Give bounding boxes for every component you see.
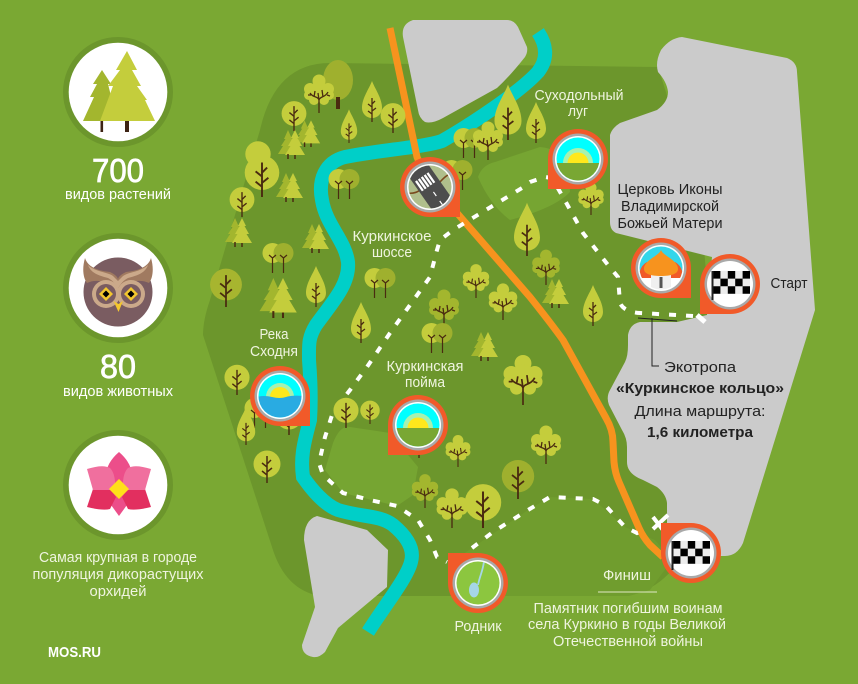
- stat: orchids: орхидей: [90, 584, 146, 600]
- map labels: Родник: [454, 619, 502, 635]
- trees: [210, 60, 604, 528]
- stat: plants: 700: [92, 152, 144, 189]
- map labels: Церковь Иконы: [618, 182, 722, 198]
- eco trail caption: 1,6 километра: [647, 425, 754, 441]
- city area: south: [302, 516, 388, 657]
- stat: orchids: Самая крупная в городе: [39, 550, 197, 566]
- finish caption: Памятник погибшим воинам: [534, 601, 722, 617]
- map labels: Куркинская: [386, 359, 464, 375]
- marker: dry meadow: [548, 129, 608, 189]
- map labels: Владимирской: [621, 199, 719, 215]
- map labels: шоссе: [372, 245, 412, 261]
- icon: owl: [63, 233, 173, 343]
- marker: Kurkino highway: [400, 154, 460, 220]
- marker: church: [631, 238, 691, 298]
- eco trail dotted route: [319, 177, 705, 562]
- map labels: Сходня: [250, 344, 298, 360]
- marker: Kurkino floodplain: [388, 395, 448, 455]
- map labels: [250, 88, 808, 635]
- finish caption: села Куркино в годы Великой: [528, 617, 726, 633]
- stat: orchids: популяция дикорастущих: [32, 567, 204, 583]
- city area: north: [403, 20, 527, 122]
- marker: finish flag: [661, 523, 721, 583]
- finish caption: [528, 568, 726, 650]
- map labels: Суходольный: [534, 88, 624, 104]
- marker: Skhodnya river: [250, 366, 310, 426]
- map labels: Божьей Матери: [618, 216, 722, 232]
- river Skhodnya: [302, 32, 545, 632]
- marker: start flag: [700, 254, 760, 314]
- logo: MOS.RU: [48, 644, 101, 661]
- stat: orchids: [32, 430, 204, 600]
- marker: spring: [448, 553, 508, 613]
- stat: animals: [63, 233, 174, 400]
- map base: park area: [203, 63, 710, 596]
- icon: orchid flower: [63, 430, 173, 540]
- map labels: Куркинское: [352, 229, 432, 245]
- stat: plants: [63, 37, 173, 203]
- stat: plants: видов растений: [65, 187, 171, 203]
- icon: trees: [63, 37, 173, 147]
- eco trail caption: [616, 360, 784, 441]
- stat: animals: 80: [100, 348, 136, 385]
- finish caption: Финиш: [603, 568, 651, 584]
- map labels: луг: [568, 104, 588, 120]
- map labels: Старт: [770, 276, 808, 292]
- map labels: пойма: [405, 375, 446, 391]
- Kurkino highway road: [390, 28, 663, 557]
- finish caption: Отечественной войны: [553, 634, 703, 650]
- leader line to eco trail caption: [638, 318, 677, 366]
- stat: animals: видов животных: [63, 384, 174, 400]
- eco trail caption: «Куркинское кольцо»: [616, 381, 784, 397]
- map labels: Река: [260, 327, 289, 343]
- city area: east: [608, 37, 815, 556]
- eco trail caption: Длина маршрута:: [634, 404, 766, 420]
- eco trail caption: Экотропа: [664, 360, 737, 376]
